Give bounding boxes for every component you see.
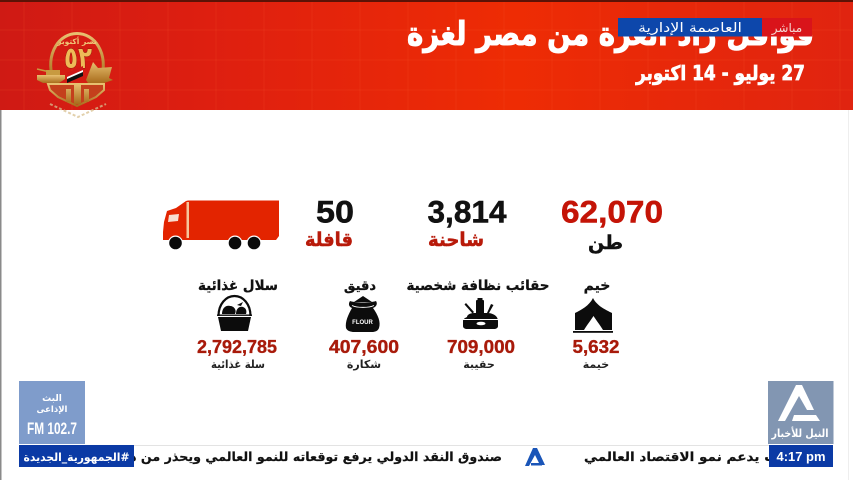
item: food baskets: سلال غذائية	[198, 278, 278, 294]
emblem: 52 anniversary	[37, 34, 113, 117]
time tag: 4:17 pm	[776, 450, 826, 464]
item: flour: دقيق	[344, 279, 376, 294]
stat: tons: طن	[588, 232, 623, 254]
channel logo: Nile News	[768, 381, 834, 444]
emblem: 52 anniversary: ٥٢	[64, 41, 92, 76]
stat: convoys: قافلة	[305, 229, 353, 251]
ticker headline: economy: ب يدعم نمو الاقتصاد العالمي	[584, 449, 778, 464]
hashtag tag	[19, 445, 134, 467]
item: flour: شكارة	[347, 358, 381, 371]
item: hygiene bags: حقيبة	[463, 358, 495, 371]
ticker headline: IMF: صندوق النقد الدولي يرفع توقعاته للنمو العالمي ويحذر من د	[130, 449, 502, 464]
time tag	[769, 445, 833, 467]
radio box: FM 102.7: الإذاعى	[37, 405, 68, 415]
header band	[0, 0, 853, 117]
item: food baskets	[197, 278, 278, 371]
ticker logo	[525, 448, 545, 466]
item: food baskets: 2,792,785	[197, 337, 277, 357]
stat: tons: 62,070	[561, 194, 663, 230]
hashtag tag: #الجمهورية_الجديدة	[24, 450, 130, 465]
stat: convoys: 50	[316, 194, 354, 230]
page edges	[0, 110, 849, 480]
item: food baskets: سلة غذائية	[211, 358, 265, 371]
item: tents: 5,632	[572, 337, 620, 357]
live location tag	[618, 18, 812, 36]
icon: toiletry bag	[462, 298, 499, 329]
icon: flour sack: FLOUR	[352, 320, 373, 326]
icon: truck	[163, 200, 279, 250]
icon: food basket	[217, 296, 252, 331]
stat: trucks: 3,814	[428, 194, 507, 230]
item: hygiene bags: 709,000	[447, 337, 515, 357]
radio box: FM 102.7: FM 102.7	[27, 419, 77, 438]
radio box: FM 102.7	[19, 381, 85, 444]
item: hygiene bags	[406, 278, 550, 371]
icon: tent	[573, 298, 613, 333]
item: tents: خيمة	[583, 358, 609, 371]
ticker	[19, 445, 833, 467]
emblem: 52 anniversary: نصر أكتوبر	[56, 36, 97, 46]
live location tag: العاصمة الإدارية	[638, 21, 742, 36]
radio box: FM 102.7: البث	[42, 394, 62, 404]
live location tag: مباشر	[771, 21, 802, 36]
stat: convoys	[305, 194, 354, 251]
subtitle: dates: 27 يوليو - 14 اكتوبر	[635, 61, 805, 85]
item: tents	[572, 278, 620, 371]
stat: tons	[561, 194, 663, 254]
item: hygiene bags: حقائب نظافة شخصية	[406, 278, 550, 294]
stat: trucks	[428, 194, 507, 251]
item: flour	[329, 279, 399, 371]
channel logo: Nile News: النيل للأخبار	[771, 426, 828, 440]
item: tents: خيم	[584, 278, 610, 294]
stat: trucks: شاحنة	[428, 229, 484, 251]
item: flour: 407,600	[329, 337, 399, 357]
